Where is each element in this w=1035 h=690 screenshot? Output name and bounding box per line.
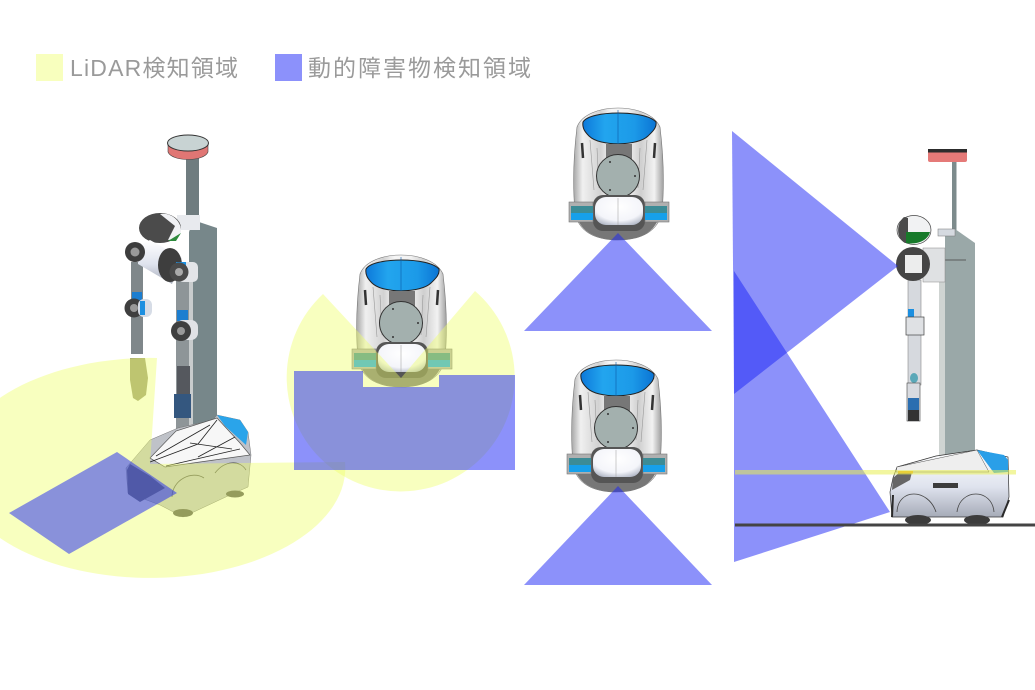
dynamic obstacle detection area [294,371,515,470]
ground line [735,524,1035,526]
detection cone upper [732,131,898,394]
LiDAR detection sector [0,358,345,578]
robot: side view [890,149,1009,525]
robot: front view [352,255,452,387]
legend swatch: LiDAR [36,54,63,81]
robot: front view upper [569,108,669,240]
panel: front view, upper sensor [524,108,712,331]
robot: front view lower [567,360,667,492]
legend swatch: dynamic obstacle [275,54,302,81]
panel: perspective view [0,135,345,578]
LiDAR detection strip [735,470,1016,474]
panel: side view [732,131,1035,562]
legend [36,54,531,81]
robot: perspective [124,135,251,517]
legend label: LiDAR: LiDAR検知領域 [70,55,238,81]
panel: front view with both areas [287,255,515,491]
panel: front view, lower sensor [524,360,712,585]
detection triangle lower [524,486,712,585]
detection triangle upper [524,233,712,331]
LiDAR detection circle [287,291,515,491]
detection cone lower [734,271,890,562]
legend label: dynamic obstacle: 動的障害物検知領域 [308,55,531,81]
dynamic obstacle detection plane [9,452,177,554]
